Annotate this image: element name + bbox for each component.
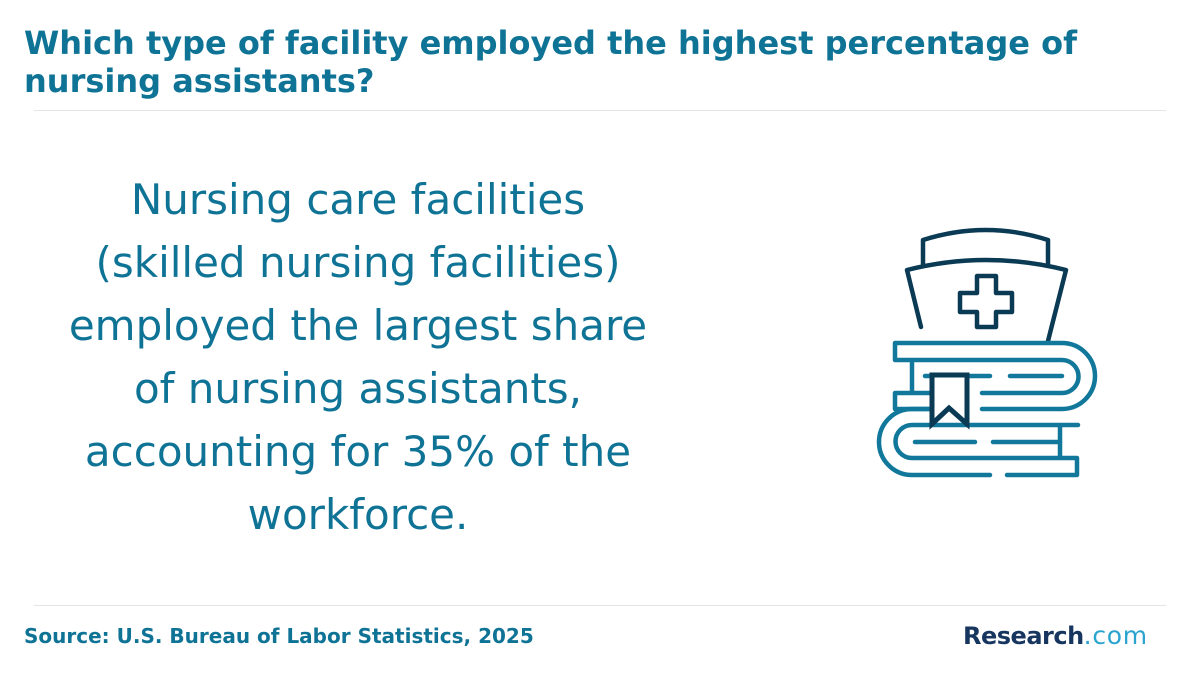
title (24, 24, 1078, 100)
logo: Research.com: Research.com (963, 621, 1148, 650)
title: nursing assistants? (24, 62, 374, 100)
main statement text: workforce. (248, 490, 468, 539)
main statement text: accounting for 35% of the (85, 427, 631, 476)
source line: Source: U.S. Bureau of Labor Statistics, 2025 (24, 624, 534, 648)
icon: nurse cap (907, 230, 1066, 341)
main statement text: employed the largest share (69, 301, 647, 350)
main statement text: (skilled nursing facilities) (96, 238, 620, 287)
main statement text (69, 175, 647, 539)
icon: stack of books (879, 343, 1095, 475)
main statement text: of nursing assistants, (134, 364, 582, 413)
icon: bookmark (932, 375, 967, 424)
main statement text: Nursing care facilities (131, 175, 585, 224)
title: Which type of facility employed the highest percentage of (24, 24, 1077, 62)
